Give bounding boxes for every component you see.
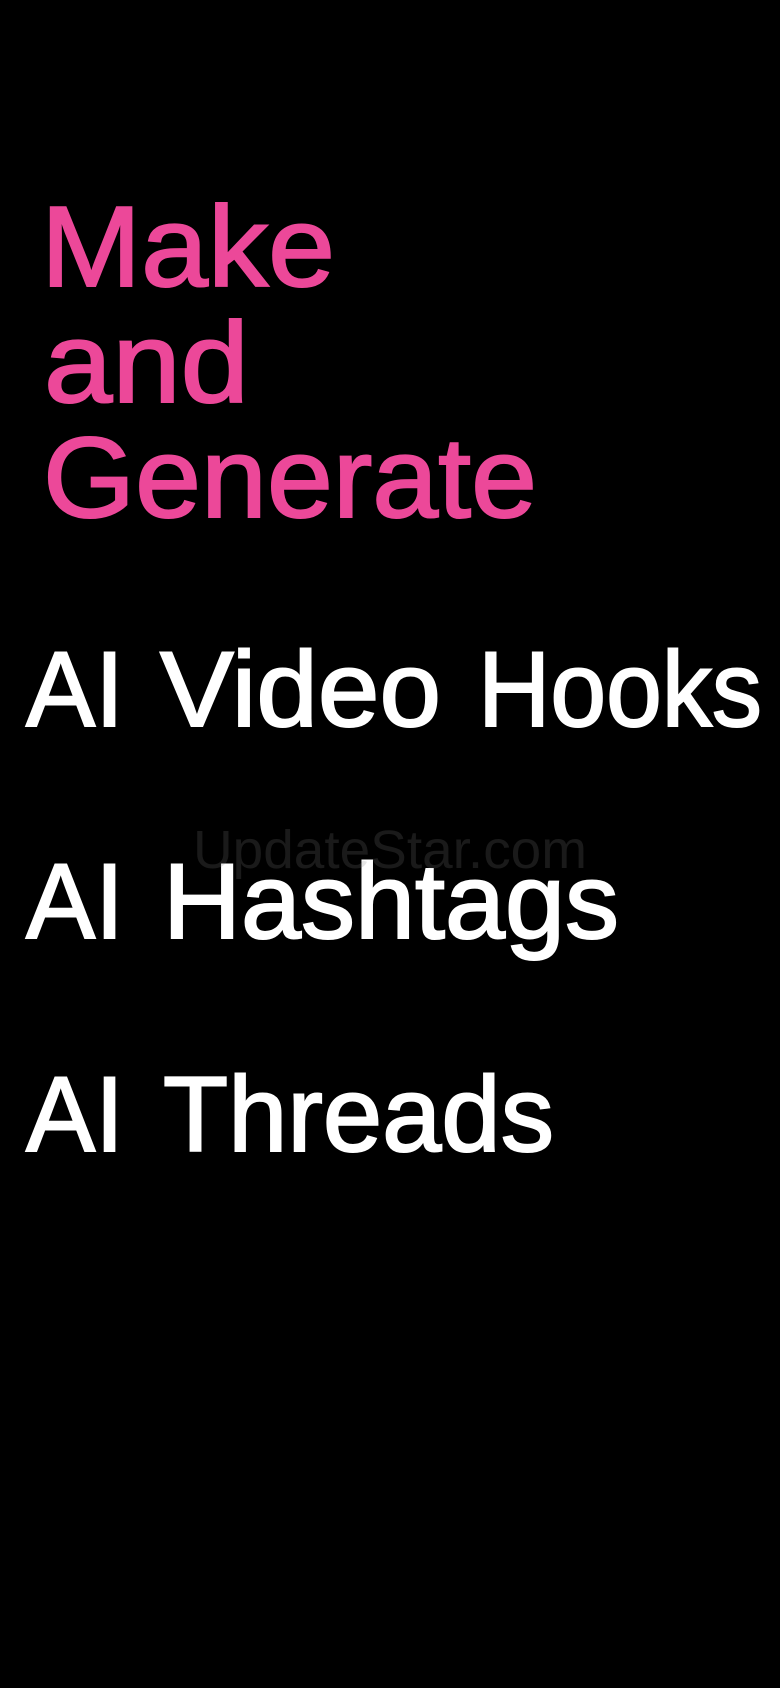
heading: make and generate: Make bbox=[41, 184, 335, 311]
watermark: UpdateStar.com bbox=[193, 820, 587, 880]
item: AI Threads: Threads bbox=[163, 1054, 554, 1174]
item: AI Video Hooks: Hooks bbox=[478, 629, 762, 749]
heading: make and generate bbox=[41, 184, 537, 542]
item: AI Video Hooks: Video bbox=[160, 629, 441, 749]
heading: make and generate: and bbox=[44, 300, 249, 427]
item: AI Threads: AI bbox=[26, 1054, 124, 1174]
item: AI Hashtags: Hashtags bbox=[163, 841, 619, 961]
heading: make and generate: Generate bbox=[43, 415, 537, 542]
item: AI Hashtags: AI bbox=[26, 841, 124, 961]
list of AI features bbox=[26, 629, 762, 1174]
item: AI Video Hooks bbox=[26, 629, 762, 749]
item: AI Video Hooks: AI bbox=[26, 629, 124, 749]
